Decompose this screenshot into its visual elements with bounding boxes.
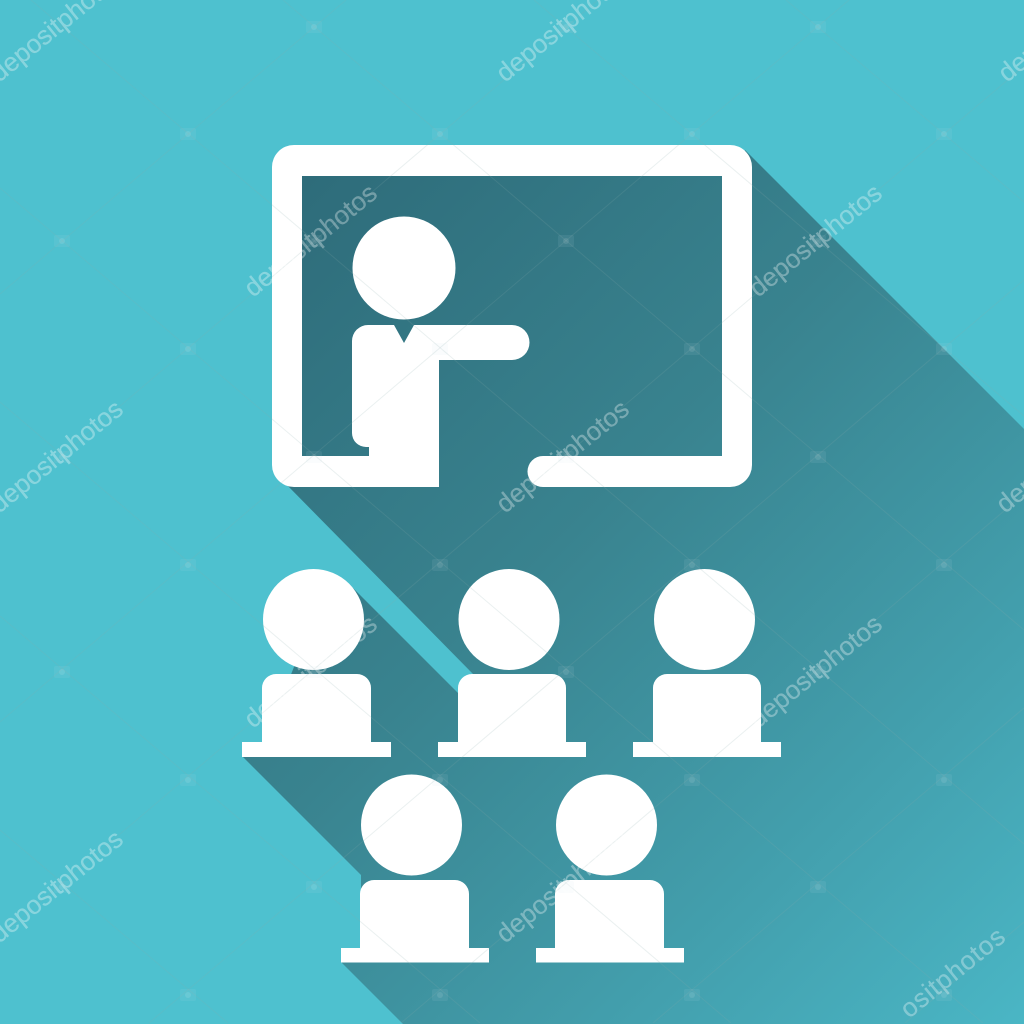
icon: student row 2 left: [341, 774, 489, 962]
icon: student row 1 left: [242, 569, 391, 757]
watermark text: depositphotos: [490, 393, 635, 519]
watermark text: ositphotos: [894, 921, 1011, 1024]
icon: teacher: [352, 216, 530, 460]
icon: student row 1 right: [633, 569, 781, 757]
icon: student row 2 right: [536, 774, 684, 962]
watermark text: depositphotos: [490, 823, 635, 949]
watermark text: depositphotos: [743, 608, 888, 734]
panel: blackboard frame: [272, 145, 752, 487]
watermark text: depositphotos: [238, 177, 383, 303]
watermark text: depositphotos: [743, 177, 888, 303]
watermark text: depositphotos: [238, 608, 383, 734]
long shadow: [243, 150, 1024, 1024]
icon: student row 1 middle: [438, 569, 586, 757]
